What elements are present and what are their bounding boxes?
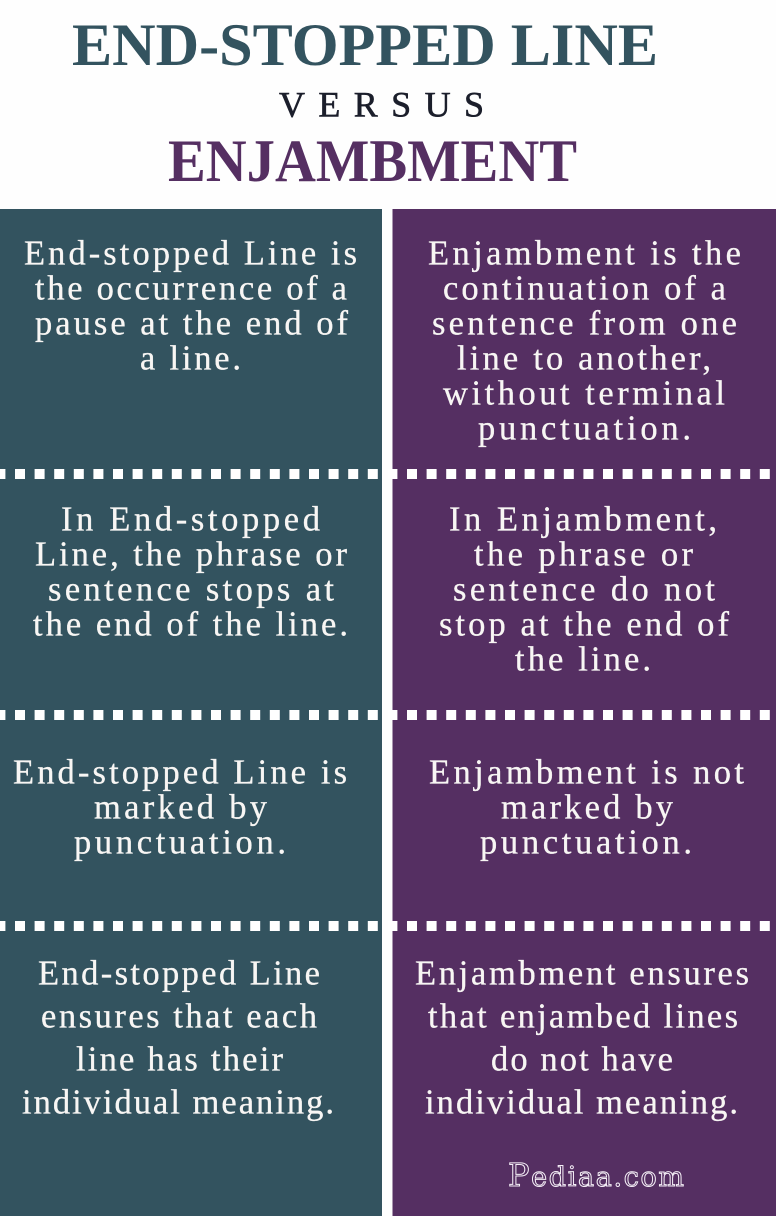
title: End-Stopped Line: END-STOPPED LINE (72, 12, 658, 78)
text: end-stopped definition (24, 234, 357, 378)
text: enjambment meaning: individual meaning. (425, 1084, 738, 1122)
text: enjambment phrase continues: the phrase or (474, 536, 694, 574)
text: enjambment phrase continues (439, 500, 730, 678)
text: end-stopped phrase stops: Line, the phrase or (35, 536, 348, 574)
text: end-stopped punctuation: punctuation. (74, 824, 286, 862)
text: enjambment phrase continues: In Enjambment, (449, 500, 717, 538)
text: enjambment meaning (415, 954, 749, 1122)
text: end-stopped meaning: End-stopped Line (38, 954, 320, 992)
text: enjambment punctuation (429, 754, 744, 862)
text: end-stopped meaning: ensures that each (41, 998, 317, 1036)
text: enjambment phrase continues: the line. (515, 640, 651, 678)
panel: end-stopped line column (0, 209, 382, 1216)
subtitle: versus: VERSUS (279, 84, 484, 124)
text: enjambment punctuation: punctuation. (480, 824, 692, 862)
text: end-stopped meaning: individual meaning. (22, 1084, 334, 1122)
text: end-stopped punctuation (13, 754, 347, 862)
text: enjambment definition: Enjambment is the (428, 234, 741, 272)
text: end-stopped definition: End-stopped Line is (24, 234, 357, 272)
text: end-stopped meaning: line has their (76, 1040, 284, 1078)
panel: enjambment column (392, 209, 776, 1216)
text: end-stopped meaning (22, 954, 334, 1122)
text: enjambment definition: sentence from one (432, 304, 737, 342)
text: enjambment punctuation: marked by (501, 788, 674, 826)
text: enjambment definition: without terminal (443, 374, 725, 412)
text: enjambment meaning: do not have (491, 1040, 673, 1078)
text: end-stopped definition: a line. (140, 340, 241, 378)
text: enjambment definition (428, 234, 741, 448)
text: end-stopped phrase stops: In End-stopped (61, 500, 320, 538)
text: end-stopped punctuation: marked by (94, 788, 268, 826)
text: end-stopped definition: the occurrence of a (35, 270, 347, 308)
text: end-stopped definition: pause at the end of (35, 304, 348, 342)
text: end-stopped punctuation: End-stopped Line is (13, 754, 347, 792)
title: Enjambment: ENJAMBMENT (168, 128, 577, 194)
logo: Pediaa.com: Pediaa.com (508, 1156, 684, 1194)
text: end-stopped phrase stops: sentence stops at (48, 570, 334, 608)
text: enjambment phrase continues: sentence do not (453, 570, 715, 608)
dotted divider 1 (0, 469, 770, 479)
text: enjambment definition: line to another, (457, 340, 711, 378)
dotted divider 3 (0, 921, 770, 931)
dotted divider 2 (0, 710, 770, 720)
text: end-stopped phrase stops: the end of the line. (33, 606, 348, 644)
text: enjambment meaning: that enjambed lines (428, 998, 738, 1036)
text: enjambment meaning: Enjambment ensures (415, 954, 749, 992)
text: end-stopped phrase stops (33, 500, 348, 644)
text: enjambment punctuation: Enjambment is not (429, 754, 744, 792)
text: enjambment definition: punctuation. (478, 410, 691, 448)
text: enjambment definition: continuation of a (443, 270, 726, 308)
text: enjambment phrase continues: stop at the end of (439, 606, 730, 644)
